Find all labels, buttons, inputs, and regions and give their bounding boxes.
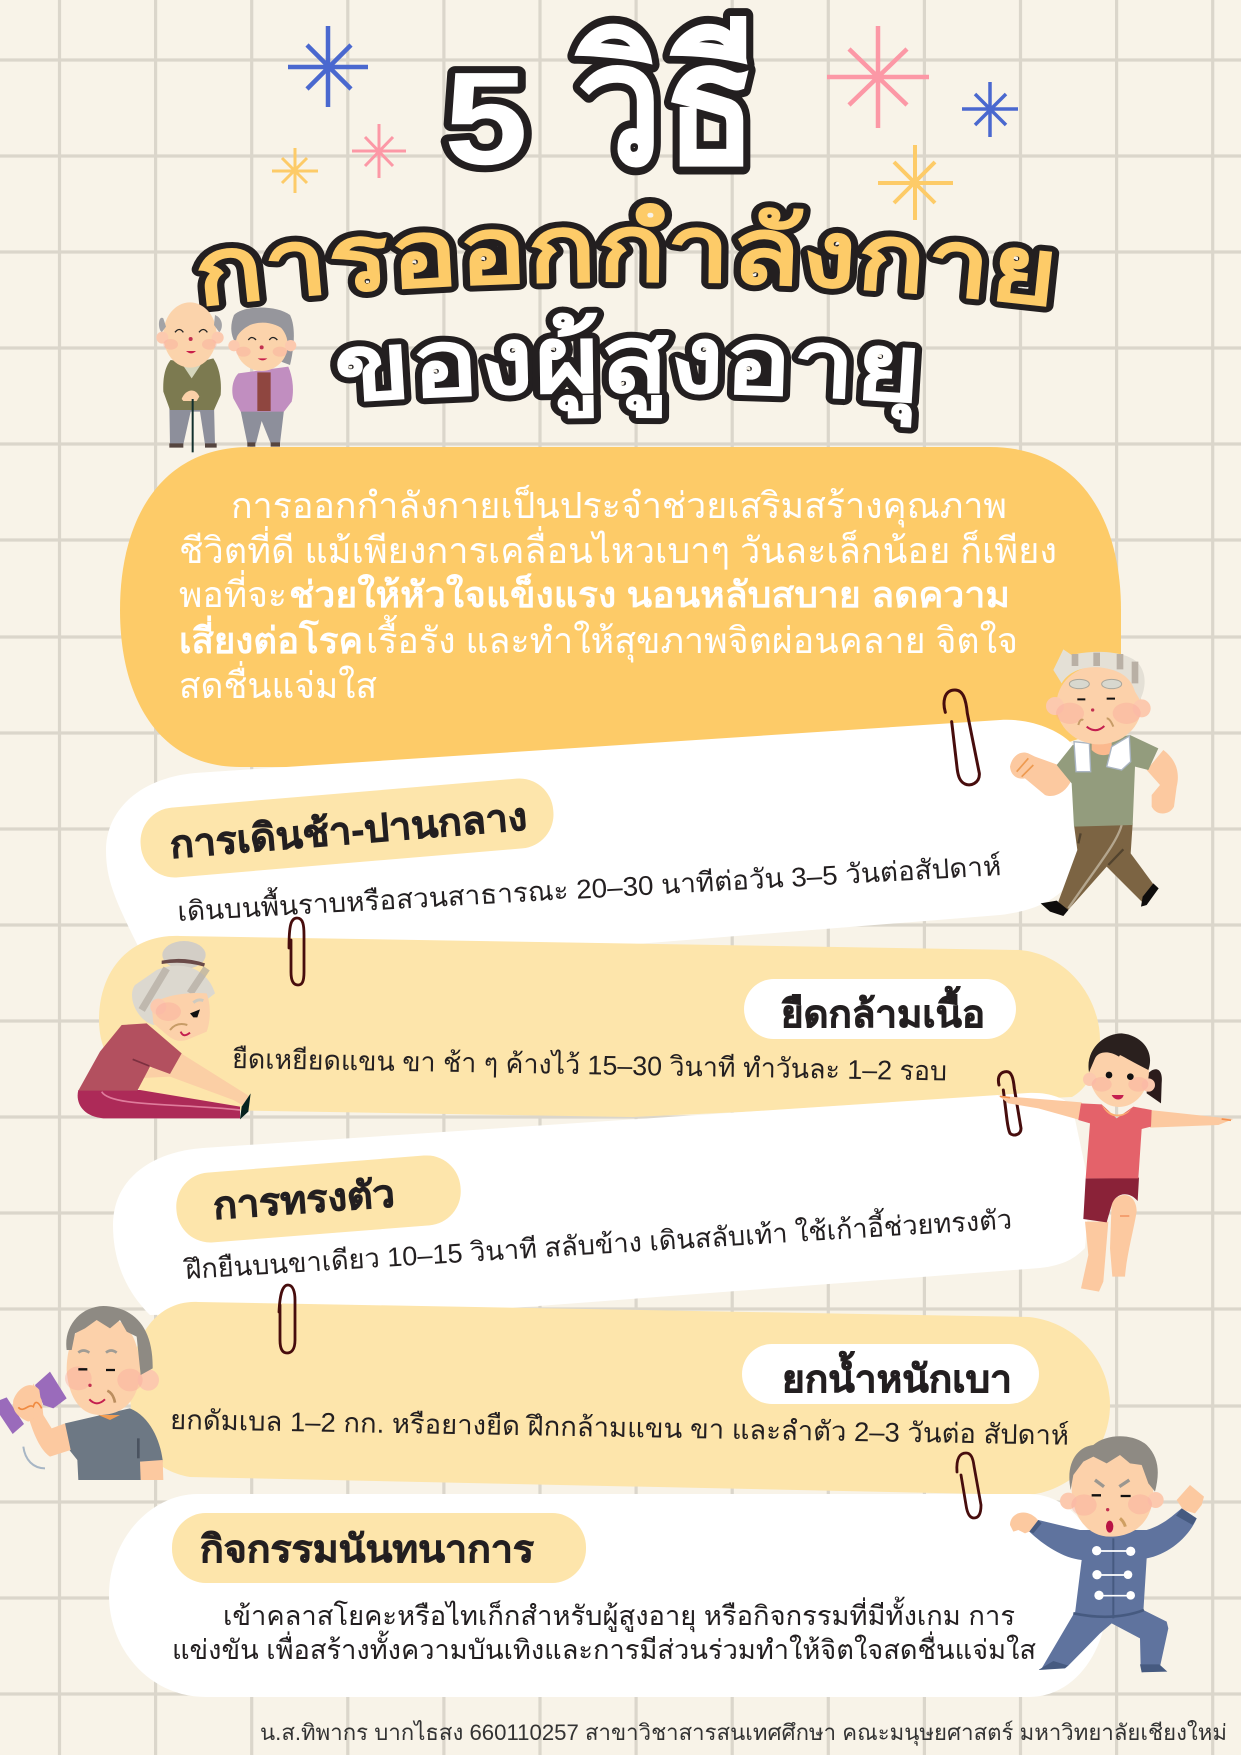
heading: ยืดกล้ามเนื้อ xyxy=(781,986,985,1036)
panel: stretching xyxy=(99,936,1100,1117)
description: ยกดัมเบล 1–2 กก. หรือยางยืด ฝึกกล้ามแขน ขา และลำตัว 2–3 วันต่อ สัปดาห์ xyxy=(170,1404,1069,1451)
icon: balancing girl xyxy=(998,1033,1233,1292)
title: ของผู้สูงอายุ: ของผู้สูงอายุ xyxy=(330,306,922,434)
heading: ยกน้ำหนักเบา xyxy=(782,1351,1012,1401)
intro line 5: สดชื่นแจ่มใส xyxy=(179,661,377,706)
panel: intro xyxy=(120,447,1121,767)
label pill xyxy=(742,1344,1039,1404)
description: เข้าคลาสโยคะหรือไทเก็กสำหรับผู้สูงอายุ หรือกิจกรรมที่มีทั้งเกม การ xyxy=(223,1596,1015,1633)
star: yellow large xyxy=(878,145,953,220)
star: blue small xyxy=(962,82,1018,137)
description: แข่งขัน เพื่อสร้างทั้งความบันเทิงและการมีส่วนร่วมทำให้จิตใจสดชื่นแจ่มใส xyxy=(172,1630,1036,1665)
description xyxy=(172,1596,1036,1665)
credit line: น.ส.ทิพากร บากไธสง 660110257 สาขาวิชาสารสนเทศศึกษา คณะมนุษยศาสตร์ มหาวิทยาลัยเชียงใหม่ xyxy=(260,1720,1227,1746)
description: ยืดเหยียดแขน ขา ช้า ๆ ค้างไว้ 15–30 วินาที ทำวันละ 1–2 รอบ xyxy=(232,1044,947,1086)
label pill xyxy=(174,1153,463,1245)
title: การออกกำลังกาย: การออกกำลังกาย xyxy=(192,197,1060,312)
label pill xyxy=(172,1513,586,1583)
heading: การทรงตัว xyxy=(212,1173,396,1228)
label pill xyxy=(744,979,1016,1039)
icon: paperclip 3 xyxy=(998,1072,1021,1135)
panel: light weights xyxy=(130,1302,1110,1495)
intro line 1: การออกกำลังกายเป็นประจำช่วยเสริมสร้างคุณภาพ xyxy=(231,483,1007,528)
intro line 3: พอที่จะ xyxy=(179,570,287,615)
panel: brisk walking xyxy=(106,720,1087,950)
icon: man with dumbbell xyxy=(0,1306,163,1480)
description: เดินบนพื้นราบหรือสวนสาธารณะ 20–30 นาทีต่อวัน 3–5 วันต่อสัปดาห์ xyxy=(176,846,1002,927)
intro line 2: ชีวิตที่ดี แม้เพียงการเคลื่อนไหวเบาๆ วันละเล็กน้อย ก็เพียง xyxy=(179,526,1057,571)
icon: stretching woman xyxy=(78,941,251,1119)
intro line 4: เสี่ยงต่อโรค xyxy=(179,615,363,661)
intro line 4 xyxy=(179,614,1018,663)
description: ฝึกยืนบนขาเดียว 10–15 วินาที สลับข้าง เดินสลับเท้า ใช้เก้าอี้ช่วยทรงตัว xyxy=(182,1200,1013,1285)
star: yellow small xyxy=(272,148,318,193)
intro line 4: เรื้อรัง และทำให้สุขภาพจิตผ่อนคลาย จิตใจ xyxy=(366,614,1018,663)
icon: elderly couple xyxy=(156,302,296,452)
star: pink small xyxy=(352,124,406,178)
icon: paperclip 5 xyxy=(957,1453,981,1518)
icon: tai chi man xyxy=(1010,1436,1204,1672)
icon: walking man xyxy=(1010,649,1178,916)
intro line 3: ช่วยให้หัวใจแข็งแรง นอนหลับสบาย ลดความ xyxy=(289,572,1010,615)
icon: paperclip 4 xyxy=(279,1285,295,1353)
star: blue large xyxy=(288,26,368,107)
heading: กิจกรรมนันทนาการ xyxy=(200,1529,535,1571)
label pill xyxy=(138,776,556,880)
panel: recreation xyxy=(109,1494,1107,1697)
title: 5 วิธี: 5 xyxy=(444,45,528,192)
title: 5 วิธี xyxy=(444,9,758,201)
icon: paperclip 1 xyxy=(944,690,979,785)
title: 5 วิธี: วิธี xyxy=(574,9,758,201)
heading: การเดินช้า-ปานกลาง xyxy=(168,796,529,867)
icon: paperclip 2 xyxy=(289,918,304,985)
star: pink large xyxy=(827,26,929,128)
panel: balance xyxy=(113,1093,1090,1315)
